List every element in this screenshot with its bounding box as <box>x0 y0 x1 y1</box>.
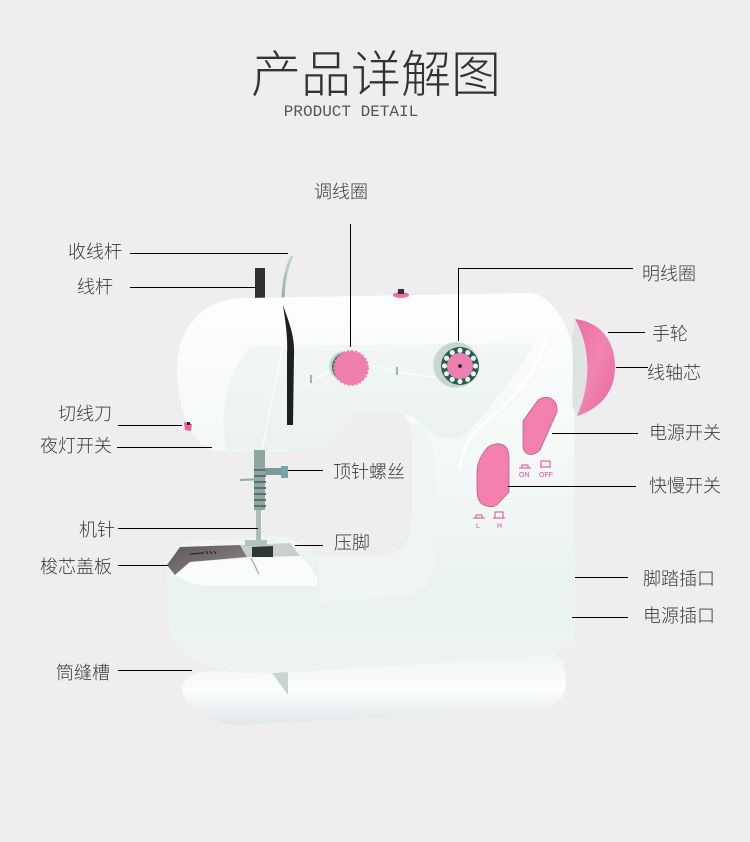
speed switch <box>473 444 509 530</box>
label: 机针: 机针 <box>79 520 115 540</box>
free arm slot <box>272 672 288 695</box>
arm front shading <box>224 343 535 450</box>
tension knob <box>329 351 368 385</box>
machine body <box>167 293 575 673</box>
hand wheel <box>572 319 615 416</box>
label: 收线杆: 收线杆 <box>68 242 122 262</box>
column front strip <box>318 424 435 602</box>
label: 调线圈: 调线圈 <box>314 182 368 202</box>
label: 明线圈: 明线圈 <box>642 264 696 284</box>
bobbin cover marks <box>190 551 216 554</box>
label: 线轴芯: 线轴芯 <box>647 363 701 383</box>
speed switch: H <box>497 523 502 530</box>
power switch: ON <box>519 472 530 479</box>
black tension slot <box>283 305 294 425</box>
label: 顶针螺丝: 顶针螺丝 <box>333 462 405 482</box>
thread take-up lever <box>283 256 292 303</box>
subtitle: PRODUCT DETAIL <box>284 103 418 121</box>
power switch: OFF <box>539 472 553 479</box>
label: 夜灯开关: 夜灯开关 <box>40 436 112 456</box>
bobbin winder <box>433 342 479 388</box>
label: 压脚: 压脚 <box>334 533 370 553</box>
threads <box>262 340 440 450</box>
label: 筒缝槽 <box>56 663 192 683</box>
base plate <box>182 648 566 725</box>
label: 切线刀 <box>58 404 182 426</box>
label: 快慢开关: 快慢开关 <box>649 476 721 496</box>
label: 明线圈 <box>458 264 696 341</box>
bed front highlight <box>175 556 317 586</box>
thread cutter <box>184 422 192 431</box>
power switch <box>519 397 557 479</box>
label: 线轴芯 <box>616 363 701 383</box>
speed switch: L <box>476 523 480 530</box>
bobbin cover <box>167 545 247 575</box>
label: 线杆: 线杆 <box>77 277 113 297</box>
label: 梭芯盖板: 梭芯盖板 <box>40 557 112 577</box>
label: 筒缝槽: 筒缝槽 <box>56 663 110 683</box>
sewing machine <box>167 256 615 725</box>
thread guides <box>311 367 397 383</box>
label: 顶针螺丝 <box>288 462 405 482</box>
label: 梭芯盖板 <box>40 557 168 577</box>
presser foot and needle bar <box>240 450 288 574</box>
label: 脚踏插口: 脚踏插口 <box>643 569 715 589</box>
top pin <box>393 289 409 298</box>
title: 产品详解图 <box>251 47 501 103</box>
label: 手轮 <box>608 324 688 344</box>
needle plate <box>240 543 300 557</box>
label: 切线刀: 切线刀 <box>58 404 112 424</box>
label: 压脚 <box>295 533 370 553</box>
arm white highlight <box>460 337 547 470</box>
spool pin <box>255 268 265 298</box>
label: 电源开关: 电源开关 <box>649 423 721 443</box>
label: 脚踏插口 <box>575 569 715 589</box>
label: 手轮: 手轮 <box>652 324 688 344</box>
label: 电源插口: 电源插口 <box>643 606 715 626</box>
